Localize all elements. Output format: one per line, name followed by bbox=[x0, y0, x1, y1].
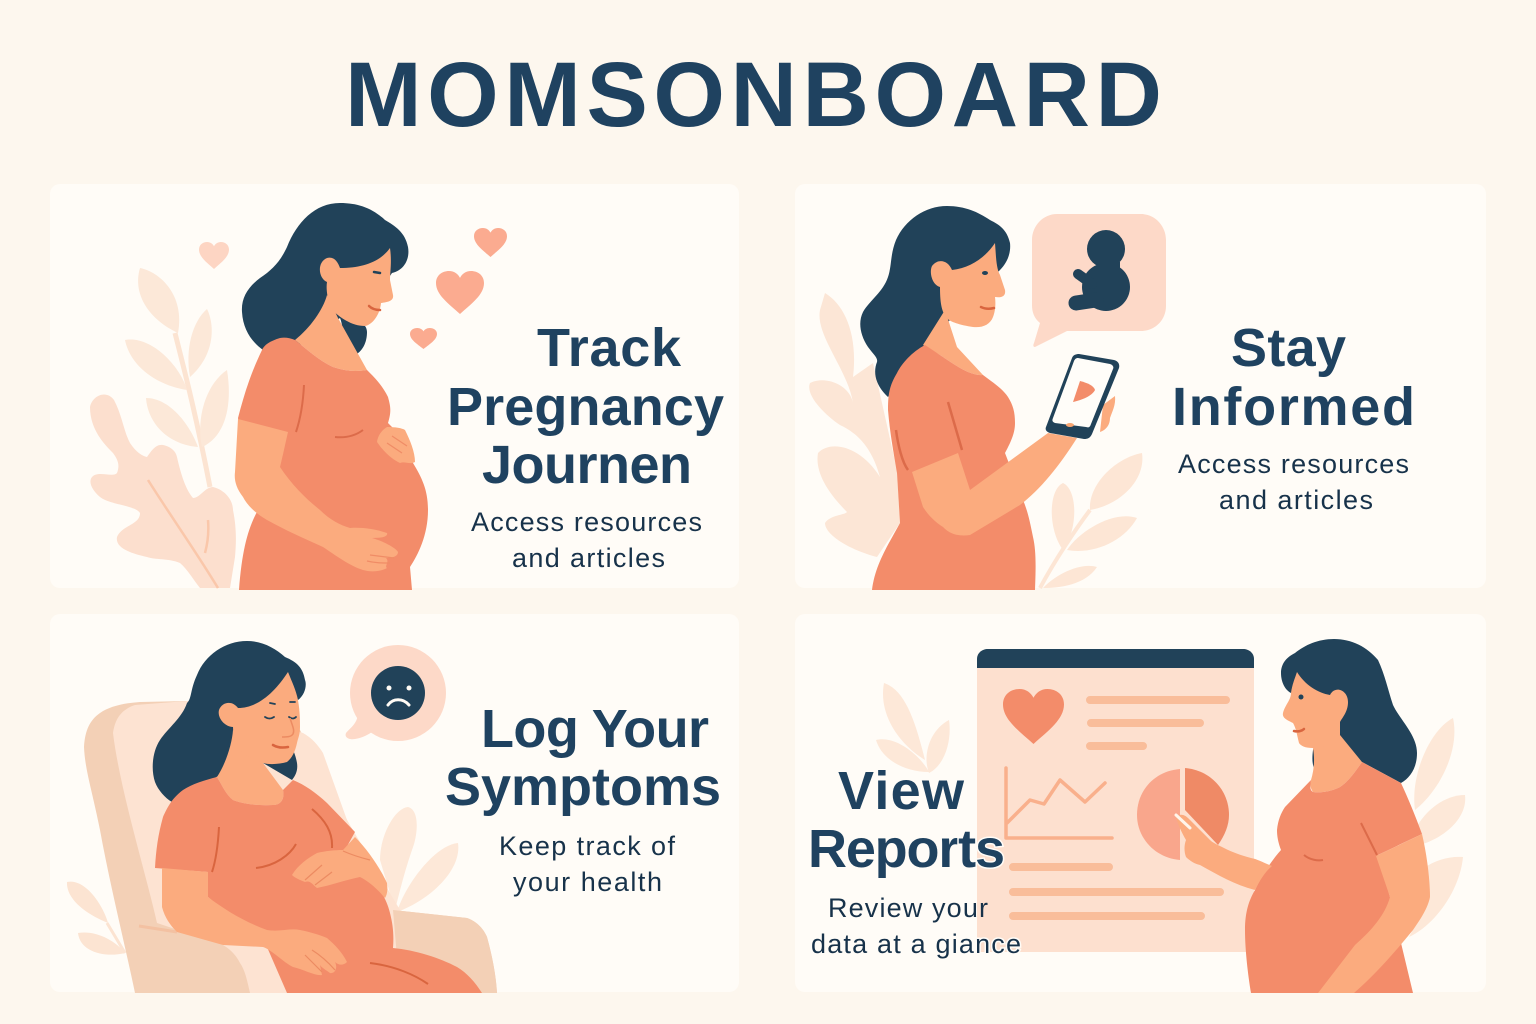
description bbox=[499, 831, 675, 897]
icon: background leaves bbox=[809, 293, 1142, 588]
heading: View bbox=[838, 761, 965, 821]
title: MOMSONBOARD bbox=[345, 44, 1162, 146]
description bbox=[811, 893, 1021, 959]
panel: log your symptoms bbox=[50, 614, 739, 993]
callout: speech bubble with fetus bbox=[1032, 214, 1166, 347]
description bbox=[471, 507, 702, 573]
description bbox=[1178, 449, 1409, 515]
description: Keep track of bbox=[499, 831, 675, 861]
description: your health bbox=[513, 867, 662, 897]
panel: stay informed bbox=[795, 184, 1486, 590]
line chart bbox=[1006, 768, 1112, 838]
icon: heart bbox=[1003, 689, 1064, 744]
illustration: pregnant woman bbox=[235, 203, 428, 590]
illustration: woman with phone bbox=[860, 206, 1119, 590]
icon: background leaves bbox=[90, 268, 236, 588]
illustration: resting woman bbox=[153, 641, 482, 993]
heading: Pregnancy bbox=[447, 377, 724, 437]
heading: Track bbox=[537, 318, 682, 378]
text lines bbox=[1013, 700, 1226, 916]
description: data at a giance bbox=[811, 929, 1021, 959]
heading: Stay bbox=[1231, 318, 1346, 378]
heading bbox=[1172, 318, 1415, 437]
icon: background leaves bbox=[876, 683, 1465, 937]
heading: Reports bbox=[808, 819, 1005, 879]
icon: phone bbox=[1046, 354, 1119, 439]
description: and articles bbox=[1219, 485, 1373, 515]
heading bbox=[447, 318, 724, 495]
icon: hearts bbox=[199, 228, 507, 349]
icon: background leaves bbox=[67, 807, 458, 955]
description: and articles bbox=[512, 543, 665, 573]
heading: Log Your bbox=[481, 699, 709, 759]
callout: sad face bubble bbox=[346, 645, 446, 741]
heading: Journen bbox=[482, 435, 692, 495]
heading bbox=[445, 699, 721, 817]
illustration: armchair bbox=[84, 701, 497, 993]
heading: Informed bbox=[1172, 377, 1415, 437]
chart: report board bbox=[977, 649, 1254, 952]
panel: view reports bbox=[795, 614, 1486, 993]
heading: Symptoms bbox=[445, 757, 721, 817]
description: Access resources bbox=[1178, 449, 1409, 479]
heading bbox=[808, 761, 1005, 879]
panel: track pregnancy journey bbox=[50, 184, 739, 590]
description: Access resources bbox=[471, 507, 702, 537]
description: Review your bbox=[828, 893, 988, 923]
pie chart bbox=[1137, 768, 1229, 860]
illustration: woman pointing at chart bbox=[1176, 639, 1430, 993]
